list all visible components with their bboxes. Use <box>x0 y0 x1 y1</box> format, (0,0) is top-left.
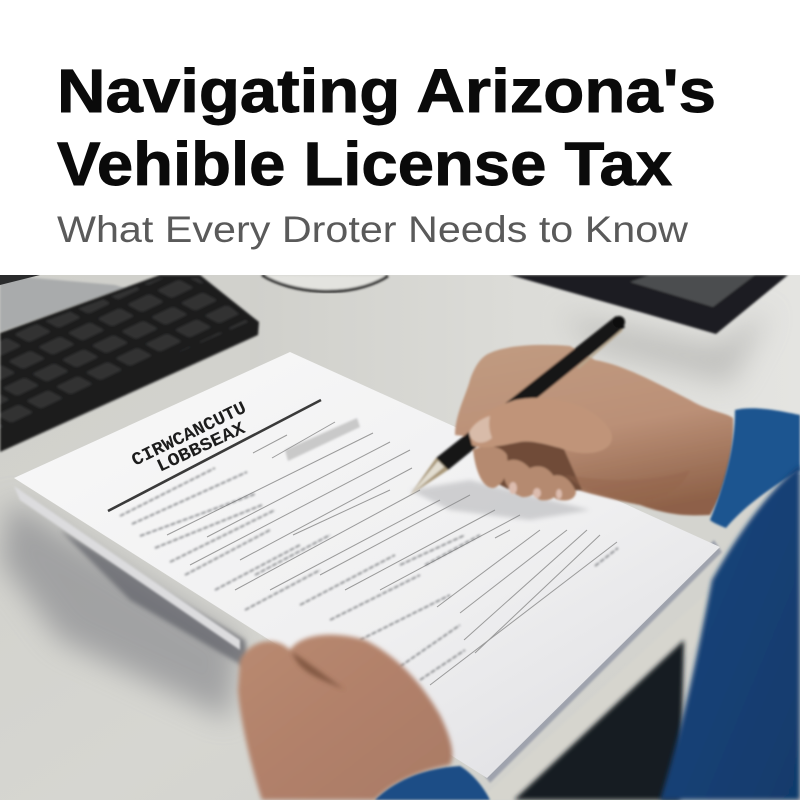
device: dark box <box>510 275 788 334</box>
title: Navigating Arizona's <box>57 57 716 125</box>
form heading text: CIRWCANCUTU <box>129 399 250 471</box>
tax form paper <box>14 352 720 778</box>
blue sweater cuff <box>710 408 800 528</box>
form heading text: LOBBSEAX <box>154 419 249 477</box>
paper stack edge <box>480 540 722 783</box>
title <box>57 57 716 198</box>
small blurred form text <box>120 468 618 680</box>
lower finger shadow <box>292 652 340 688</box>
subtitle: What Every Droter Needs to Know <box>57 209 688 250</box>
desk surface <box>0 275 800 800</box>
lower hand <box>238 635 452 800</box>
fingernails <box>509 482 562 499</box>
keyboard <box>0 275 259 452</box>
paper shadow <box>0 500 240 720</box>
blue sweater body <box>660 465 800 800</box>
hand shadow on paper <box>410 480 590 520</box>
title: Vehible License Tax <box>57 130 672 198</box>
right hand <box>410 316 733 515</box>
back of hand <box>455 345 733 515</box>
monitor base <box>0 275 125 332</box>
shadow gap under thumb <box>493 440 582 492</box>
lower sleeve <box>375 766 490 800</box>
pen <box>410 316 625 495</box>
desk front edge <box>480 595 730 800</box>
header background <box>0 0 800 275</box>
lower fingers <box>473 446 576 501</box>
photo: desk scene <box>0 275 800 800</box>
knuckle shading <box>568 476 588 484</box>
thumbnail <box>469 416 492 443</box>
grey field box <box>285 418 360 461</box>
cable <box>262 275 388 291</box>
device shadow <box>575 314 763 389</box>
form field lines <box>167 422 617 685</box>
form heading rule <box>108 400 321 511</box>
thumb <box>469 398 612 453</box>
dark area under desk <box>514 640 684 800</box>
